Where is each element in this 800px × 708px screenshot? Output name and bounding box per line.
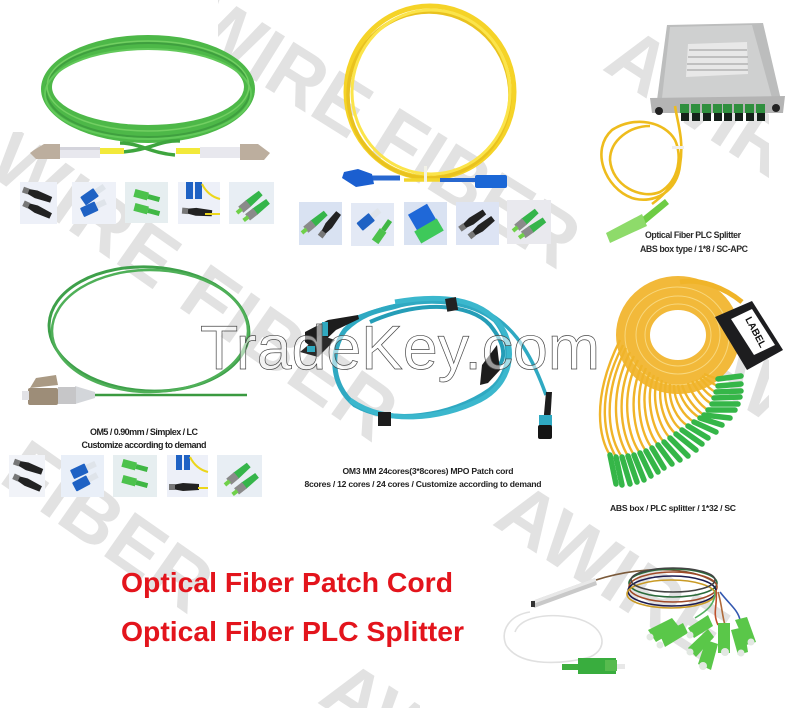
- watermark: repeated AWIRE FIBER: AWIRE: [482, 464, 744, 678]
- connector thumbnails row 2: [299, 200, 551, 246]
- caption: PLC splitter: [640, 230, 749, 254]
- heading: red product titles: [121, 567, 464, 647]
- caption: PLC splitter: ABS box type / 1*8 / SC-APC: [640, 244, 749, 254]
- heading: red product titles: Optical Fiber Patch Cord: [121, 567, 453, 598]
- caption: MPO cable: 8cores / 12 cores / 24 cores / Customize according to demand: [304, 479, 542, 489]
- product: ABS box PLC splitter 1x32: [600, 281, 783, 485]
- product: yellow SC patch cord: [342, 6, 514, 188]
- MPO connector middle: [480, 345, 500, 385]
- connector thumbnails row 1: [20, 182, 274, 224]
- output SC connectors: [648, 615, 756, 670]
- caption: OM5 pigtail: Customize according to demand: [82, 440, 206, 450]
- input SC connector: [562, 658, 625, 674]
- caption: MPO cable: OM3 MM 24cores(3*8cores) MPO Patch cord: [342, 466, 514, 476]
- caption: OM5 pigtail: [82, 427, 206, 450]
- box label text: LABEL: [742, 315, 768, 350]
- connector thumbnails row 3: [9, 455, 262, 498]
- MPO connector top: [300, 315, 359, 357]
- product: MPO trunk cable: [300, 297, 552, 439]
- heading: red product titles: Optical Fiber PLC Splitter: [121, 616, 464, 647]
- caption: ABS box splitter: ABS box / PLC splitter / 1*32 / SC: [610, 503, 736, 513]
- green SC connector: [606, 199, 669, 243]
- green SC connector fan: [610, 376, 741, 485]
- MPO connector bottom: [538, 392, 552, 439]
- caption: MPO cable: [304, 466, 542, 489]
- product: green LC pigtail: [22, 262, 252, 405]
- caption: OM5 pigtail: OM5 / 0.90mm / Simplex / LC: [90, 427, 198, 437]
- TradeKey watermark logo: TradeKey.com: [200, 314, 600, 383]
- ABS box: [715, 301, 783, 370]
- product: LGX PLC splitter box: [601, 23, 785, 243]
- product: mini steel tube PLC splitter: [504, 568, 756, 674]
- specification label: [686, 42, 748, 77]
- caption: PLC splitter: Optical Fiber PLC Splitter: [645, 230, 742, 240]
- product: green LC duplex patch cord: [30, 35, 270, 160]
